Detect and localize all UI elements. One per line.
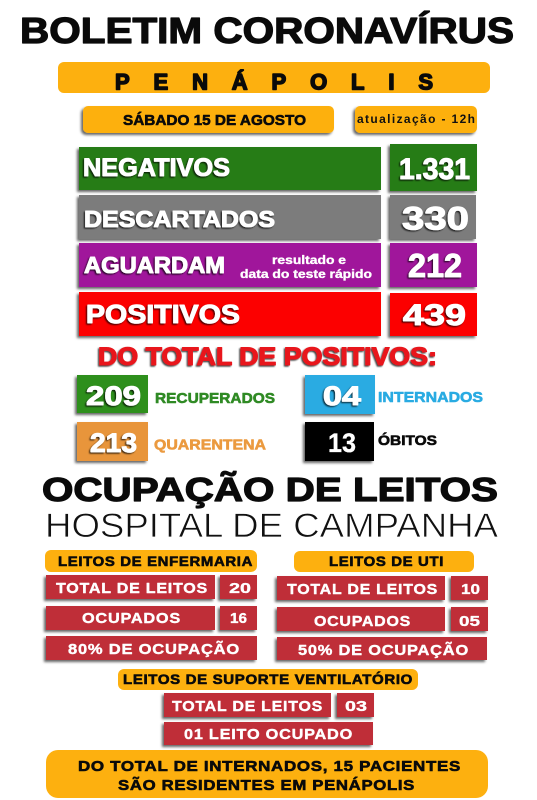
stat: internados: INTERNADOS [378,389,483,406]
stat: recuperados: 209 [86,381,141,411]
row: negativos: NEGATIVOS [83,154,230,182]
row: descartados: DESCARTADOS [84,206,275,232]
enfermaria total: 20 [229,580,251,597]
enfermaria header [45,550,257,572]
row: aguardam: AGUARDAM [84,252,225,278]
uti header [294,551,474,572]
uti ocupados [277,607,488,631]
stat: recuperados [77,375,275,413]
stat: recuperados: RECUPERADOS [155,390,275,407]
row: aguardam [79,243,477,287]
date banner: SÁBADO 15 DE AGOSTO [123,112,306,129]
enfermaria header: LEITOS DE ENFERMARIA [58,553,253,569]
row: positivos [79,292,477,336]
uti total: 10 [461,581,480,598]
enfermaria ocupados: 16 [230,610,247,627]
ventilatório ocupado [164,722,373,745]
city banner [58,62,490,94]
footer callout: DO TOTAL DE INTERNADOS, 15 PACIENTES [78,758,461,775]
section heading: do total de positivos: DO TOTAL DE POSITIVOS: [98,343,437,371]
row: descartados: 330 [402,200,469,236]
stat: quarentena: 213 [90,428,137,458]
enfermaria ocupados [46,606,257,630]
enfermaria percentual: 80% DE OCUPAÇÃO [68,640,240,658]
stat: obitos: ÓBITOS [378,431,437,448]
row: negativos: 1.331 [399,153,470,186]
stat: obitos [305,422,437,461]
uti total: TOTAL DE LEITOS [287,581,438,598]
uti total [277,576,488,600]
enfermaria total: TOTAL DE LEITOS [56,580,208,597]
ventilatório total: 03 [345,698,367,715]
uti ocupados: OCUPADOS [314,613,411,630]
uti percentual: 50% DE OCUPAÇÃO [298,641,469,659]
row: negativos [79,144,477,191]
uti header: LEITOS DE UTI [329,553,444,569]
stat: obitos: 13 [328,428,356,458]
uti ocupados: 05 [459,613,480,630]
ventilatório header [118,669,418,690]
ventilatório header: LEITOS DE SUPORTE VENTILATÓRIO [123,670,413,687]
date banner [83,106,334,133]
row: aguardam: resultado e [272,255,346,267]
footer callout: SÃO RESIDENTES EM PENÁPOLIS [118,776,415,794]
stat: quarentena [77,422,267,461]
enfermaria percentual [46,636,257,660]
row: positivos: POSITIVOS [86,299,240,329]
stat: internados [305,375,483,414]
stat: internados: 04 [323,381,361,411]
panel: leitos de uti [277,551,488,660]
update time badge: atualização - 12h [357,112,475,126]
city banner: PENÁPOLIS [115,70,433,94]
row: descartados [79,195,476,239]
ventilatório total [164,693,374,717]
panel: suporte ventilatório [118,669,418,745]
subheading: hospital de campanha: HOSPITAL DE CAMPANHA [45,507,498,545]
row: aguardam: 212 [408,247,462,284]
stat: quarentena: QUARENTENA [154,438,267,454]
row: positivos: 439 [403,299,466,332]
panel: leitos de enfermaria [45,550,257,660]
update time badge [355,106,477,133]
enfermaria ocupados: OCUPADOS [82,610,181,627]
footer callout [46,750,488,798]
heading: ocupação de leitos: OCUPAÇÃO DE LEITOS [42,471,498,508]
ventilatório total: TOTAL DE LEITOS [172,698,323,715]
uti percentual [277,637,487,660]
ventilatório ocupado: 01 LEITO OCUPADO [184,726,353,743]
title: BOLETIM CORONAVÍRUS [20,10,514,51]
row: aguardam: data do teste rápido [240,269,372,281]
enfermaria total [46,575,257,599]
